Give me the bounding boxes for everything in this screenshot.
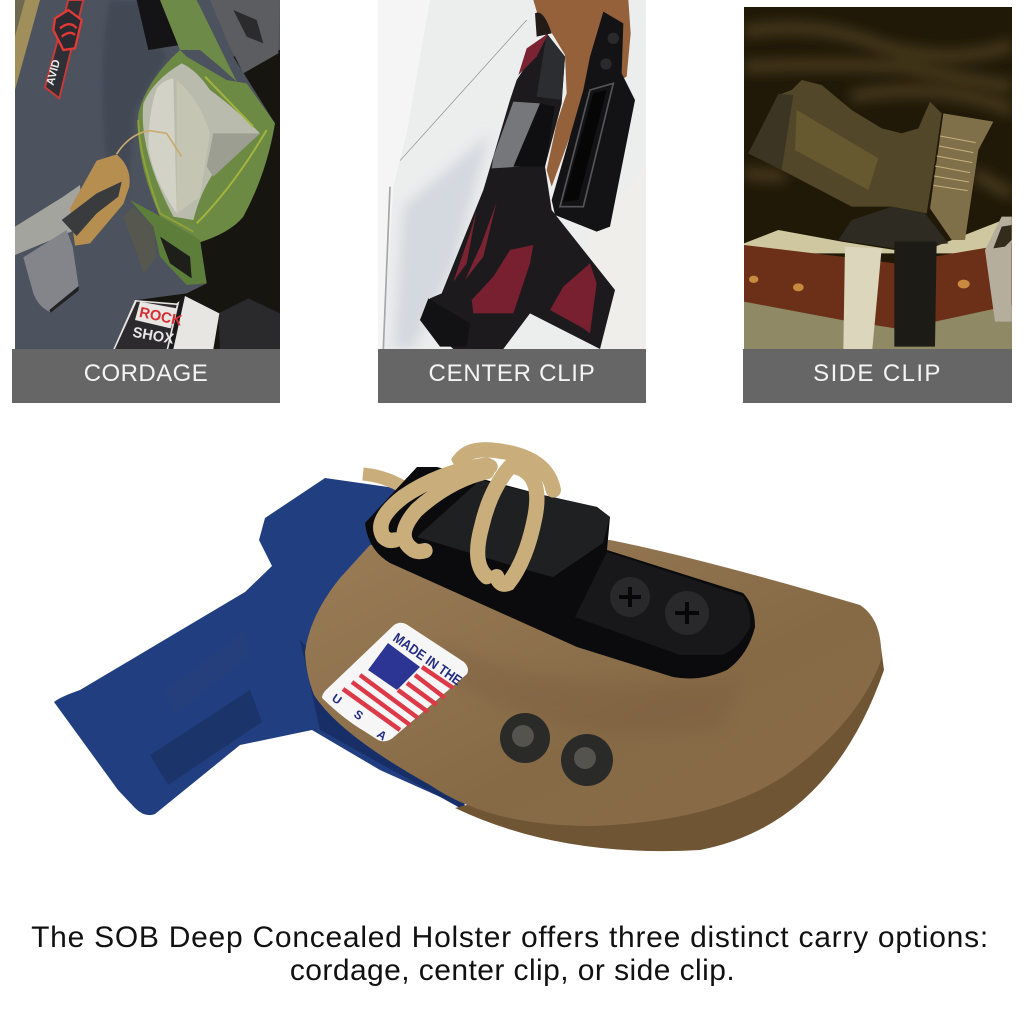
description text [31,921,989,987]
icon: made in the USA sticker: MADE IN THE [390,629,465,688]
description text: The SOB Deep Concealed Holster offers three distinct carry options: [31,921,989,954]
icon: black and red pistol [420,33,615,349]
icon: made in the USA sticker: S [351,707,366,723]
icon: black floor [113,50,280,349]
icon: blue pistol [54,478,470,815]
icon: holster shell [305,540,884,851]
icon: belt loop [843,247,882,349]
panel: center clip photo [378,0,646,349]
icon: green waist pack [123,0,275,285]
caption: cordage: CORDAGE [84,360,208,387]
icon: product box: SHOX [131,325,175,348]
icon: brown holster [533,0,631,187]
icon: product box: ROCK [138,305,184,330]
icon: grey helmet [210,0,280,73]
icon: pistol with tan holster [15,131,182,313]
fabric folds [744,28,1012,193]
icon: clip screws [610,577,709,635]
icon: product box [113,296,219,349]
icon: made in the USA sticker: A [374,727,390,744]
icon: AVID logo tag [45,0,83,98]
icon: side clip [894,242,937,347]
icon: tan pistol in holster [748,80,993,248]
caption: center clip: CENTER CLIP [429,360,595,387]
icon: AVID logo tag: AVID [45,58,63,87]
icon: belt buckle [985,217,1012,322]
description text: cordage, center clip, or side clip. [290,954,735,987]
icon: cord tail [363,474,405,488]
panel: cordage photo [15,0,280,349]
icon: bottom rivets [500,713,613,786]
caption: cordage [12,349,280,403]
icon: paracord knot [381,450,553,584]
panel: side clip photo [744,7,1012,349]
icon: center clip [552,12,635,232]
panel: holster product photo [54,442,884,852]
caption: center clip [378,349,646,403]
icon: made in the USA sticker [322,623,468,744]
caption: side clip [743,349,1012,403]
caption: side clip: SIDE CLIP [813,360,942,387]
icon: black clip [365,467,755,678]
pants [744,217,1012,253]
icon: made in the USA sticker: U [329,691,344,707]
icon: belt [744,243,1012,328]
